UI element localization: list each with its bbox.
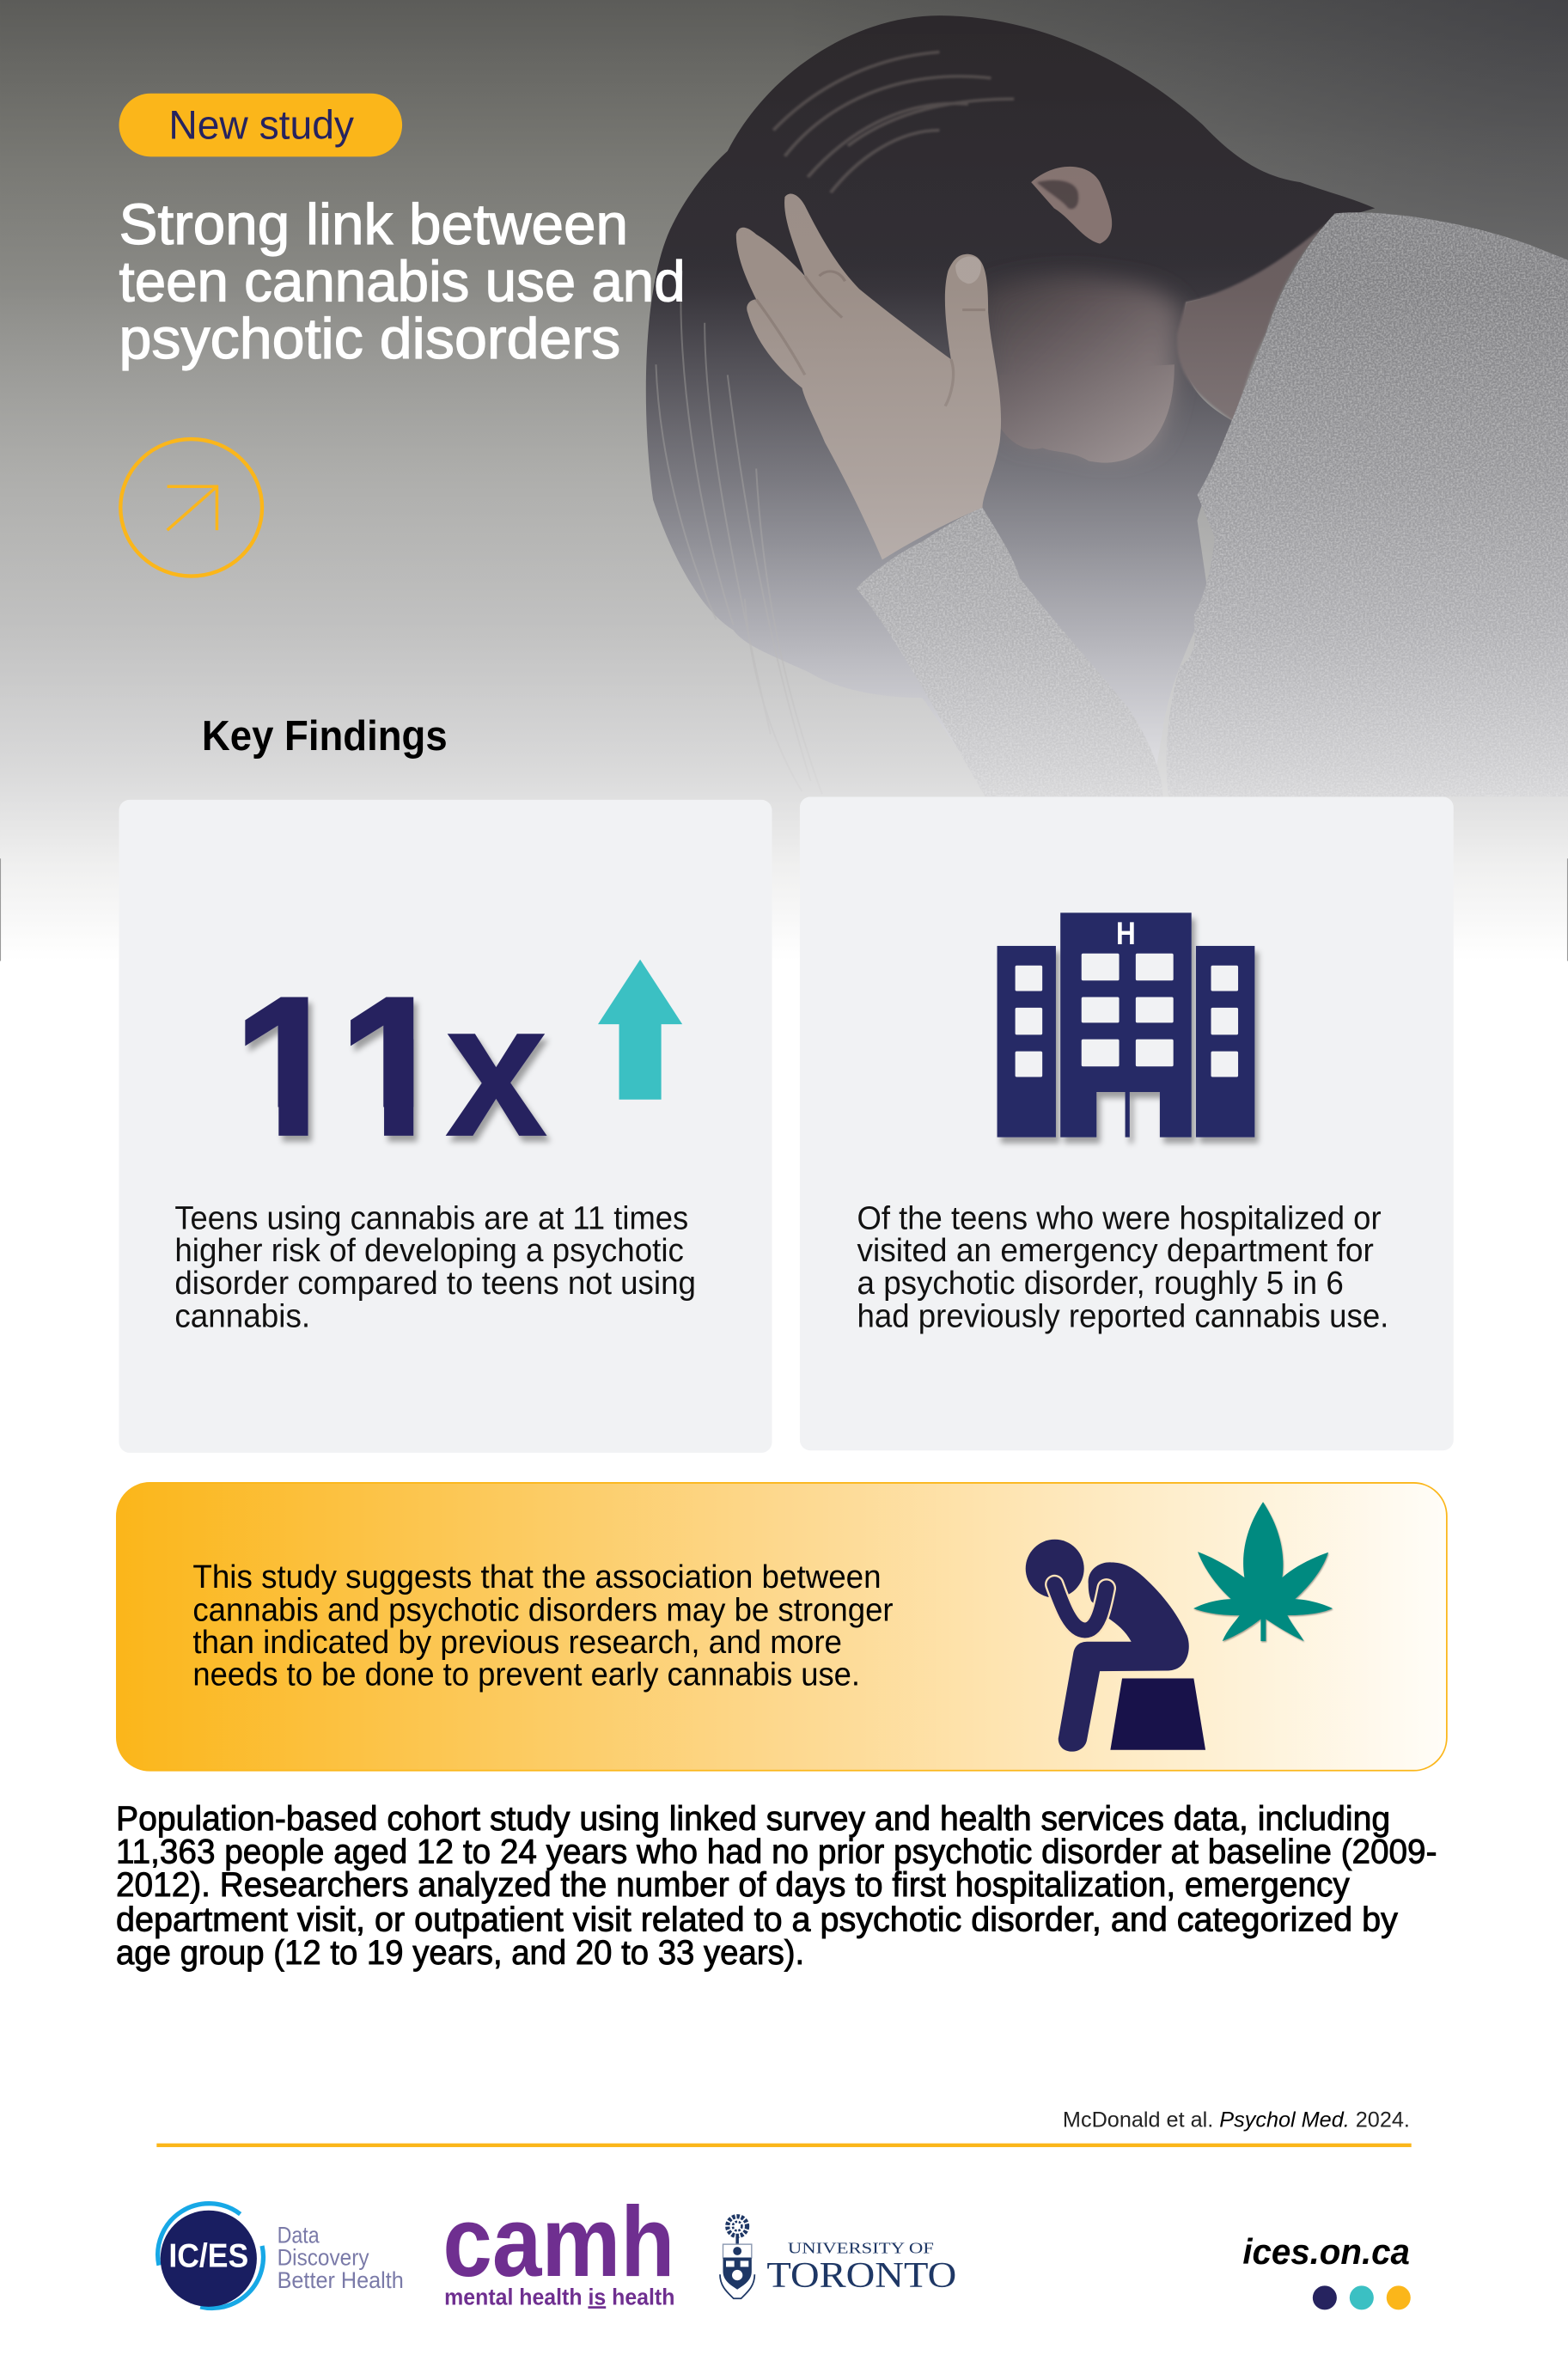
- icon: arrow in circle: [120, 439, 262, 577]
- callout text: cannabis and psychotic disorders may be stronger: [192, 1591, 894, 1627]
- heading: Key Findings: Key Findings: [202, 713, 448, 760]
- logo: camh: mental health is health: [444, 2283, 674, 2309]
- footer rule: [156, 2144, 1412, 2147]
- logo: IC/ES: [158, 2204, 404, 2308]
- hero photo background: [0, 0, 1568, 964]
- photo fade to white: [0, 0, 1568, 964]
- text: study methods: age group (12 to 19 years, and 20 to 33 years).: [116, 1934, 804, 1972]
- icon: cannabis leaf: [1193, 1502, 1333, 1641]
- title: teen cannabis use and: [119, 251, 686, 314]
- panel: 11 times risk: [119, 800, 772, 1453]
- text: risk finding: higher risk of developing a psychotic: [174, 1232, 684, 1268]
- text: study methods: [116, 1800, 1437, 1972]
- icon: seated person: [1026, 1540, 1205, 1752]
- brand dots: [1313, 2285, 1411, 2309]
- website: ices.on.ca: [1242, 2231, 1410, 2272]
- logo: IC/ES: Better Health: [278, 2266, 404, 2293]
- icon: hospital: [998, 912, 1254, 1138]
- icon: hospital: H: [1116, 916, 1136, 951]
- text: hospital finding: visited an emergency department for: [857, 1232, 1374, 1268]
- big number 11x: [245, 997, 552, 1145]
- text: study methods: 2012). Researchers analyzed the number of days to first hospitalization, emergency: [116, 1866, 1350, 1904]
- crest: [720, 2217, 754, 2298]
- panel: hospital finding: [800, 796, 1454, 1450]
- logo: IC/ES: Data: [278, 2221, 320, 2248]
- logo: University of Toronto: TORONTO: [766, 2256, 956, 2296]
- text: risk finding: Teens using cannabis are at 11 times: [174, 1200, 688, 1236]
- text: risk finding: disorder compared to teens not using: [174, 1265, 696, 1301]
- citation: McDonald et al. Psychol Med. 2024.: [1063, 2108, 1410, 2132]
- photo: woman holding her head: [646, 15, 1568, 796]
- title: psychotic disorders: [119, 308, 620, 371]
- badge: New study: [119, 94, 402, 156]
- text: risk finding: [174, 1200, 696, 1333]
- callout: study suggestion: [117, 1483, 1447, 1771]
- title: [119, 193, 686, 371]
- logo: IC/ES: Discovery: [278, 2244, 369, 2271]
- big number 11x: 1: [234, 957, 344, 1179]
- title: Strong link between: [119, 193, 628, 257]
- callout text: needs to be done to prevent early cannabis use.: [192, 1656, 860, 1693]
- logo: University of Toronto: UNIVERSITY OF: [788, 2240, 934, 2257]
- logo: camh: camh: [442, 2186, 674, 2297]
- big number 11x: 1: [339, 957, 449, 1179]
- text: risk finding: cannabis.: [174, 1297, 310, 1333]
- badge: New study: New study: [168, 102, 354, 148]
- text: hospital finding: Of the teens who were hospitalized or: [857, 1200, 1382, 1236]
- logo: University of Toronto: [720, 2217, 956, 2298]
- text: hospital finding: had previously reported cannabis use.: [857, 1297, 1388, 1333]
- logo: IC/ES: IC/ES: [168, 2237, 248, 2274]
- text: hospital finding: a psychotic disorder, roughly 5 in 6: [857, 1265, 1344, 1301]
- text: study methods: department visit, or outpatient visit related to a psychotic disorder, and categorized by: [116, 1900, 1398, 1938]
- text: hospital finding: [857, 1200, 1388, 1333]
- big number 11x: x: [444, 961, 548, 1177]
- text: study methods: 11,363 people aged 12 to 24 years who had no prior psychotic disorder at baseline (2009-: [116, 1833, 1437, 1871]
- text: study methods: Population-based cohort study using linked survey and health services data, including: [116, 1800, 1390, 1838]
- icon: up arrow: [598, 960, 682, 1100]
- callout text: [192, 1559, 894, 1693]
- callout text: than indicated by previous research, and more: [192, 1624, 842, 1660]
- callout text: This study suggests that the association between: [192, 1559, 882, 1595]
